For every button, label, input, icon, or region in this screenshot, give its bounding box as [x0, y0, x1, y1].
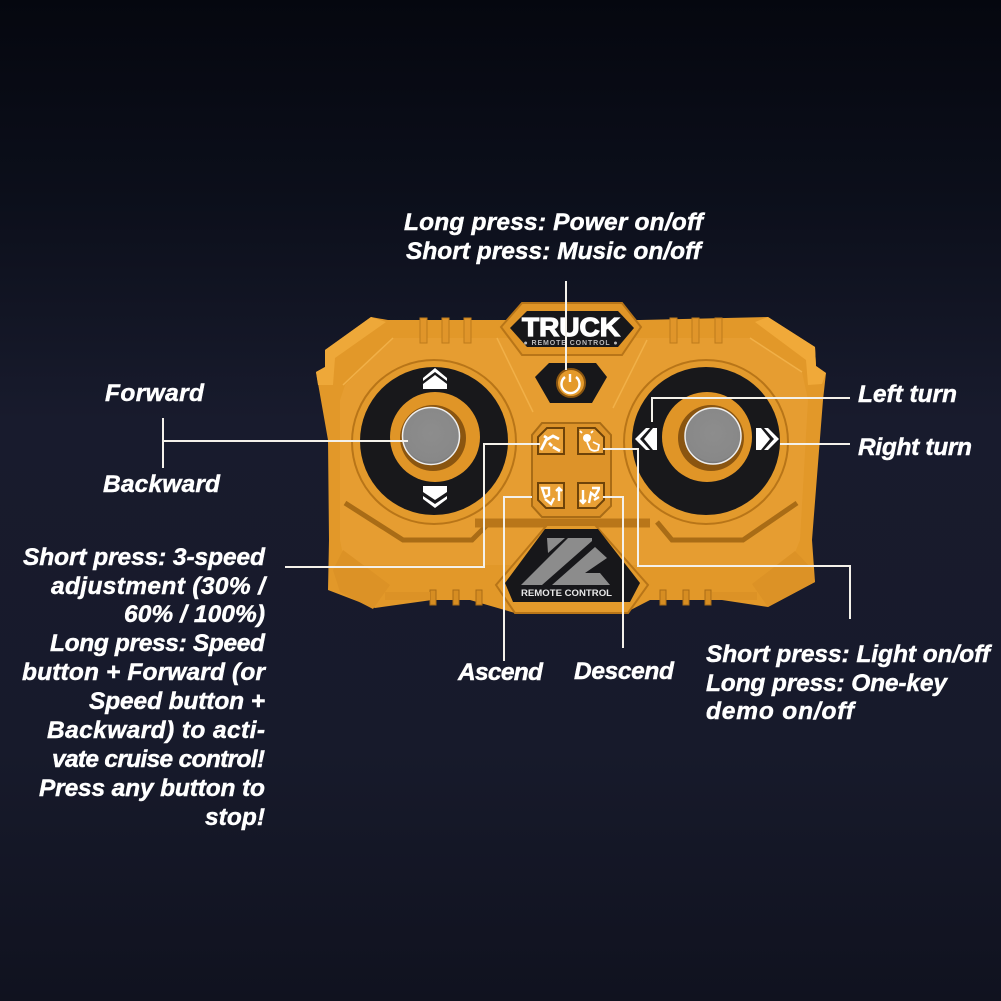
label: backward: Backward	[103, 471, 221, 498]
label: speed and cruise control: vate cruise control!	[52, 746, 265, 773]
truck badge	[501, 303, 641, 355]
right joystick	[624, 360, 788, 524]
label: light and demo	[706, 641, 993, 725]
speed button	[538, 428, 564, 454]
label: speed and cruise control: 60% / 100%)	[124, 601, 265, 628]
truck badge: TRUCK	[522, 312, 620, 342]
label: music: Short press: Music on/off	[406, 238, 704, 265]
label: speed and cruise control: Short press: 3-speed	[23, 544, 266, 571]
label: right turn: Right turn	[858, 434, 972, 461]
logo badge: REMOTE CONTROL	[521, 588, 612, 599]
label: speed and cruise control: adjustment (30% /	[51, 573, 267, 600]
label: light and demo: Long press: One-key	[706, 670, 948, 697]
button panel	[532, 423, 611, 517]
label: power: Long press: Power on/off	[404, 209, 706, 236]
light button	[578, 428, 604, 454]
remote control body	[316, 317, 826, 613]
label: speed and cruise control: Long press: Speed	[50, 630, 266, 657]
icon: left arrow	[635, 428, 657, 450]
descend button	[578, 483, 604, 508]
left joystick	[352, 360, 516, 524]
truck badge: ● REMOTE CONTROL ●	[524, 340, 618, 347]
label: descend: Descend	[574, 658, 675, 685]
label: speed and cruise control	[22, 544, 267, 831]
label: left turn: Left turn	[858, 381, 957, 408]
power button	[535, 363, 607, 403]
label: ascend: Ascend	[457, 659, 544, 686]
label: forward: Forward	[105, 380, 205, 407]
label: speed and cruise control: Backward) to acti-	[47, 717, 265, 744]
label: light and demo: Short press: Light on/off	[706, 641, 993, 668]
label: light and demo: demo on/off	[706, 698, 857, 725]
icon: up arrow	[423, 368, 447, 389]
ascend button	[538, 483, 564, 508]
label: speed and cruise control: Speed button +	[89, 688, 265, 715]
label: speed and cruise control: stop!	[205, 804, 265, 831]
logo badge	[496, 525, 648, 613]
label: speed and cruise control: button + Forward (or	[22, 659, 266, 686]
icon: down arrow	[423, 486, 447, 508]
icon: right arrow	[756, 428, 779, 450]
leader lines	[163, 281, 850, 661]
label: speed and cruise control: Press any button to	[39, 775, 265, 802]
